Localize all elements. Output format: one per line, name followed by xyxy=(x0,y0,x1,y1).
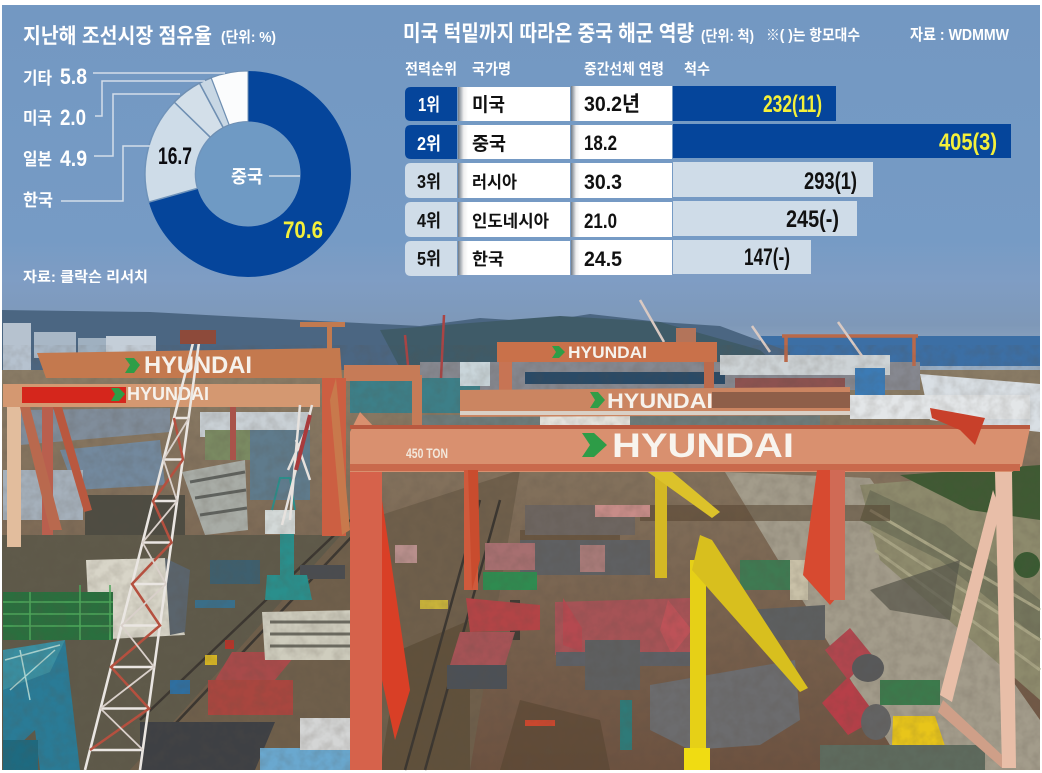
row 3: Russia xyxy=(405,162,873,198)
heading: naval strength xyxy=(403,21,1010,46)
label: Korea: 한국 xyxy=(23,191,53,210)
label: Japan 4.9: 4.9 xyxy=(60,146,87,171)
row 2: China: 18.2 xyxy=(584,132,617,155)
row 1: USA: 232(11) xyxy=(763,91,822,118)
slice: Korea 16.7 xyxy=(145,102,210,202)
green scaffold xyxy=(3,585,113,640)
heading: naval strength: ※( )는 항모대수 xyxy=(766,27,860,44)
table header: 중간선체 연령 xyxy=(584,61,664,78)
red roof blocks left xyxy=(208,598,540,715)
row 1: USA: 미국 xyxy=(472,94,505,116)
label: USA 2.0: 미국 xyxy=(23,109,52,128)
row 1: USA: 30.2년 xyxy=(584,93,640,116)
row 2: China: 405(3) xyxy=(939,129,997,156)
right leg of main crane xyxy=(938,472,1016,768)
city towers xyxy=(3,323,156,378)
row 2: China xyxy=(405,124,1011,159)
row 3: Russia: 러시아 xyxy=(472,173,517,192)
teal frame xyxy=(3,640,80,770)
slice: USA 2.0 xyxy=(200,78,229,128)
label: other 5.8: 5.8 xyxy=(60,64,87,89)
ground xyxy=(2,370,1040,770)
row 4: Indonesia xyxy=(405,201,857,237)
infographic background panel xyxy=(2,5,1040,282)
inner legs of main crane xyxy=(464,470,845,605)
row 5: Korea xyxy=(405,240,811,276)
label: HYUNDAI lower left: HYUNDAI xyxy=(127,384,209,404)
value: Korea 16.7: 16.7 xyxy=(158,143,192,170)
label: HYUNDAI far centre: HYUNDAI xyxy=(568,343,647,362)
red roof block centre xyxy=(555,598,692,666)
label: HYUNDAI middle: HYUNDAI xyxy=(607,390,713,413)
label: 450 TON: 450 TON xyxy=(406,445,448,461)
rail tracks xyxy=(140,500,500,770)
distant mountains xyxy=(2,310,790,370)
steel blocks: far centre xyxy=(483,505,650,590)
right road xyxy=(725,472,1040,770)
back yard buildings and ships xyxy=(350,355,1040,432)
label: HYUNDAI upper left: HYUNDAI xyxy=(144,352,252,379)
row 3: Russia: 30.3 xyxy=(584,171,622,194)
row 4: Indonesia: 21.0 xyxy=(584,210,617,233)
far gantry crane xyxy=(782,336,918,366)
row 3: Russia: 293(1) xyxy=(804,168,857,195)
lattice crane xyxy=(85,330,312,770)
sky and sea xyxy=(2,280,1040,370)
row 4: Indonesia: 245(-) xyxy=(786,206,839,233)
teal crane xyxy=(265,478,312,600)
row 2: China: 2위 xyxy=(417,134,441,154)
table header: 전력순위 xyxy=(405,61,457,78)
slice: Japan 4.9 xyxy=(174,83,223,137)
slice: other 5.8 xyxy=(211,71,248,125)
donut chart xyxy=(145,71,351,277)
yard equipment scatter xyxy=(170,545,940,750)
table header: 척수 xyxy=(684,61,710,78)
label: USA 2.0 xyxy=(23,105,86,130)
back gantry crane right of left pair xyxy=(344,365,422,425)
slice: China 70.6 xyxy=(149,71,351,277)
row 3: Russia: 3위 xyxy=(417,172,441,192)
row 5: Korea: 한국 xyxy=(472,250,504,269)
main gantry crane xyxy=(350,408,1030,770)
label: HYUNDAI main: HYUNDAI xyxy=(612,427,794,465)
photo: shipyard with gantry cranes xyxy=(2,280,1040,770)
row 4: Indonesia: 4위 xyxy=(417,211,441,231)
yellow crane xyxy=(645,470,808,770)
grey panels xyxy=(140,605,985,770)
panel: shipbuilding market share xyxy=(23,25,351,286)
right hillside and trees xyxy=(860,465,1040,700)
row 1: USA xyxy=(405,86,836,121)
table header: 국가명 xyxy=(472,61,511,78)
heading: naval strength: 미국 턱밑까지 따라온 중국 해군 역량 xyxy=(403,21,694,46)
panel: naval strength table xyxy=(403,21,1011,276)
row 5: Korea: 147(-) xyxy=(744,244,790,271)
label: China: 중국 xyxy=(231,167,263,187)
red tilted blocks right xyxy=(822,628,945,746)
heading: market share: (단위: %) xyxy=(221,29,276,46)
label: Japan 4.9: 일본 xyxy=(23,150,52,169)
source: Clarksons: 자료: 클락슨 리서치 xyxy=(23,269,148,286)
donut centre xyxy=(196,122,300,226)
label: other 5.8 xyxy=(23,64,87,89)
row 4: Indonesia: 인도네시아 xyxy=(472,212,549,231)
blue-white block xyxy=(260,718,362,770)
lower left gantry crane xyxy=(3,384,320,547)
far centre gantry crane xyxy=(497,328,717,390)
leader lines xyxy=(61,73,300,201)
white building block xyxy=(86,460,248,640)
centre shadow bands xyxy=(380,505,890,770)
row 5: Korea: 24.5 xyxy=(584,248,622,271)
left leg of main crane xyxy=(350,472,410,770)
boom arms in background xyxy=(405,300,862,378)
heading: naval strength: 자료 : WDMMW xyxy=(910,26,1010,44)
table header xyxy=(405,61,710,78)
label: other 5.8: 기타 xyxy=(23,69,52,88)
row 5: Korea: 5위 xyxy=(417,249,441,269)
row 2: China: 중국 xyxy=(472,134,506,155)
left sheds xyxy=(3,408,310,535)
middle gantry crane xyxy=(460,387,850,417)
heading: naval strength: (단위: 척) xyxy=(701,28,754,45)
label: Japan 4.9 xyxy=(23,146,87,171)
grey hull block xyxy=(650,660,800,750)
row 1: USA: 1위 xyxy=(418,95,440,115)
yard noise xyxy=(2,345,1040,770)
upper left gantry crane xyxy=(37,322,350,536)
value: China 70.6: 70.6 xyxy=(283,217,323,244)
label: USA 2.0: 2.0 xyxy=(60,105,86,130)
heading: market share: 지난해 조선시장 점유율 xyxy=(23,25,212,48)
